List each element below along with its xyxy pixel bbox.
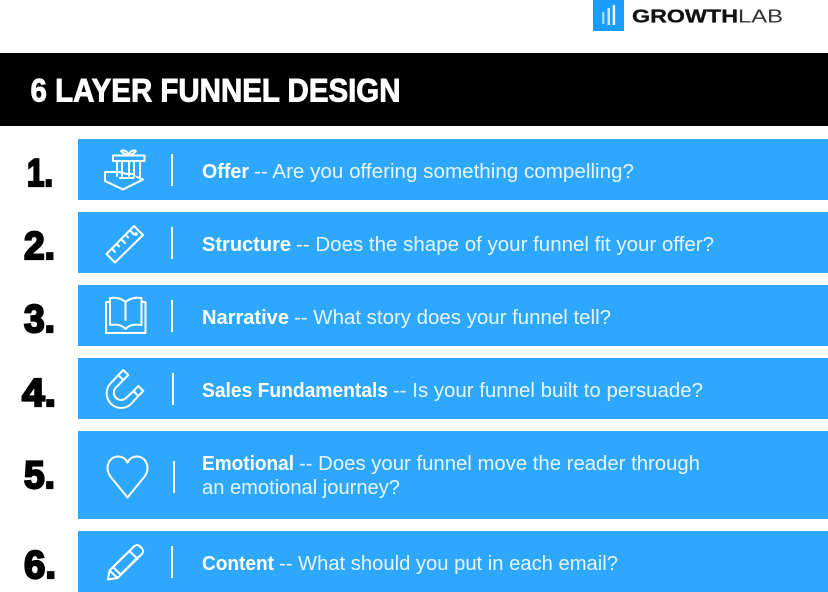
row 6: content: Content: [202, 553, 274, 575]
row 6: content: [24, 531, 828, 592]
row 4: sales fundamentals: [22, 358, 828, 419]
row 1: offer: 1.: [27, 152, 53, 195]
row 5: emotional: an emotional journey?: [202, 477, 400, 499]
title banner: [0, 53, 828, 126]
row 5: emotional: 5.: [24, 454, 55, 497]
logo: GrowthLab: [593, 0, 783, 31]
row 6: content: 6.: [24, 544, 56, 587]
row 1: offer: -- Are you offering something compelling?: [254, 161, 634, 183]
icon: ruler: [106, 226, 143, 262]
row 3: narrative: 3.: [24, 298, 55, 341]
row 5: emotional: -- Does your funnel move the reader through: [299, 453, 700, 475]
icon: pencil: [108, 545, 143, 580]
row 3: narrative: [24, 285, 828, 346]
logo: GrowthLab: LAB: [738, 6, 783, 26]
row 2: structure: Structure: [202, 234, 291, 256]
row 4: sales fundamentals: 4.: [22, 372, 56, 415]
row 5: emotional: [24, 431, 828, 519]
row 3: narrative: Narrative: [202, 307, 289, 329]
icon: gift in hand: [105, 150, 144, 190]
row 3: narrative: -- What story does your funnel tell?: [294, 307, 611, 329]
row 2: structure: -- Does the shape of your funnel fit your offer?: [296, 234, 714, 256]
row 2: structure: 2.: [24, 225, 55, 268]
row 2: structure: [24, 212, 828, 273]
row 6: content: -- What should you put in each email?: [279, 553, 618, 575]
row 5: emotional: Emotional: [202, 453, 294, 475]
icon: open book: [106, 298, 146, 333]
row 1: offer: [27, 139, 828, 200]
icon: magnet: [107, 370, 143, 408]
logo: GrowthLab: GROWTH: [632, 6, 738, 26]
title banner: 6 LAYER FUNNEL DESIGN: [30, 72, 400, 108]
row 4: sales fundamentals: Sales Fundamentals: [202, 380, 388, 402]
row 4: sales fundamentals: -- Is your funnel built to persuade?: [393, 380, 703, 402]
icon: heart: [108, 456, 147, 498]
row 1: offer: Offer: [202, 161, 249, 183]
